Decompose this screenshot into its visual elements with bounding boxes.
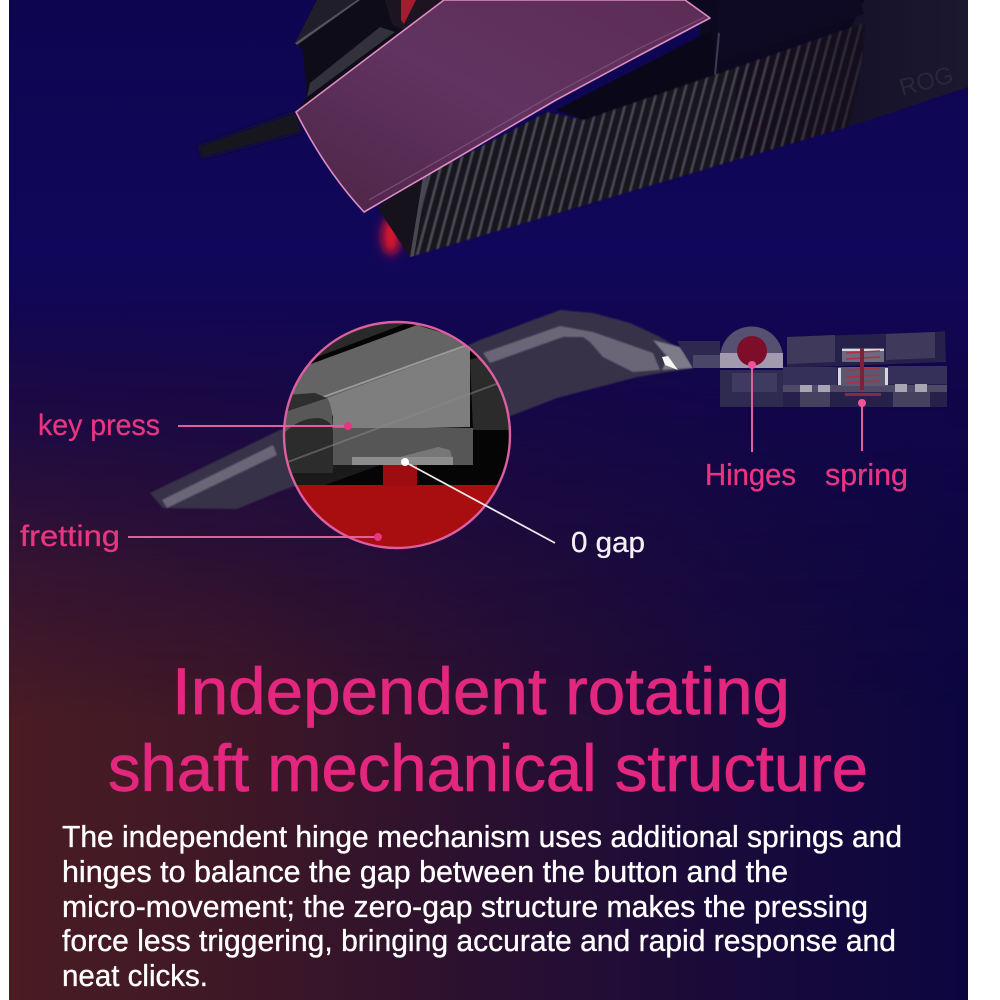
key press block	[327, 345, 470, 430]
body text: The independent hinge mechanism uses additional springs and	[62, 819, 902, 854]
label: 0 gap: 0 gap	[571, 527, 645, 559]
title	[108, 654, 868, 805]
top key band	[287, 325, 470, 412]
label: fretting: fretting	[20, 520, 120, 553]
body text: neat clicks.	[62, 958, 208, 993]
title: shaft mechanical structure	[108, 731, 868, 805]
mouse cable	[198, 112, 302, 158]
label: key press	[38, 409, 352, 442]
label: spring	[825, 399, 908, 492]
right dark side	[470, 358, 509, 430]
label: Hinges: Hinges	[705, 457, 796, 492]
scroll wheel	[385, 0, 447, 30]
mouse product image	[198, 0, 968, 257]
pink translucent button plate	[296, 0, 710, 212]
body text: force less triggering, bringing accurate and rapid response and	[62, 923, 896, 958]
body text	[62, 819, 902, 993]
label: spring: spring	[825, 457, 908, 492]
left bump	[285, 398, 333, 433]
body text: hinges to balance the gap between the button and the	[62, 854, 788, 889]
right button side	[556, 0, 864, 122]
upper mouse body	[295, 0, 404, 110]
ROG faint lettering: ROG	[897, 62, 956, 102]
title: Independent rotating	[172, 654, 790, 728]
lever tip highlight	[662, 356, 678, 370]
body text: micro-movement; the zero-gap structure makes the pressing	[62, 889, 868, 924]
hinge and spring housing	[677, 327, 947, 407]
label: fretting	[20, 520, 382, 553]
lever highlight strip left	[162, 445, 277, 508]
carbon-striped side	[410, 23, 864, 257]
magnified lens	[280, 320, 520, 555]
label: Hinges	[705, 361, 796, 492]
spring	[838, 348, 888, 396]
lever highlight strip right	[483, 326, 660, 372]
label: 0 gap	[401, 458, 645, 559]
right body fade	[700, 0, 968, 126]
red under-glow	[382, 217, 400, 255]
mechanical diagram	[20, 310, 947, 559]
upper black wedge	[317, 323, 406, 357]
lever outline	[150, 310, 693, 509]
red base and stem	[297, 485, 497, 547]
front corner	[377, 177, 423, 257]
hinge pivot	[737, 336, 767, 366]
lower grey block	[333, 428, 473, 465]
dark wedge lower left	[285, 465, 380, 485]
label: key press: key press	[38, 409, 160, 442]
lever tip block	[653, 340, 693, 370]
